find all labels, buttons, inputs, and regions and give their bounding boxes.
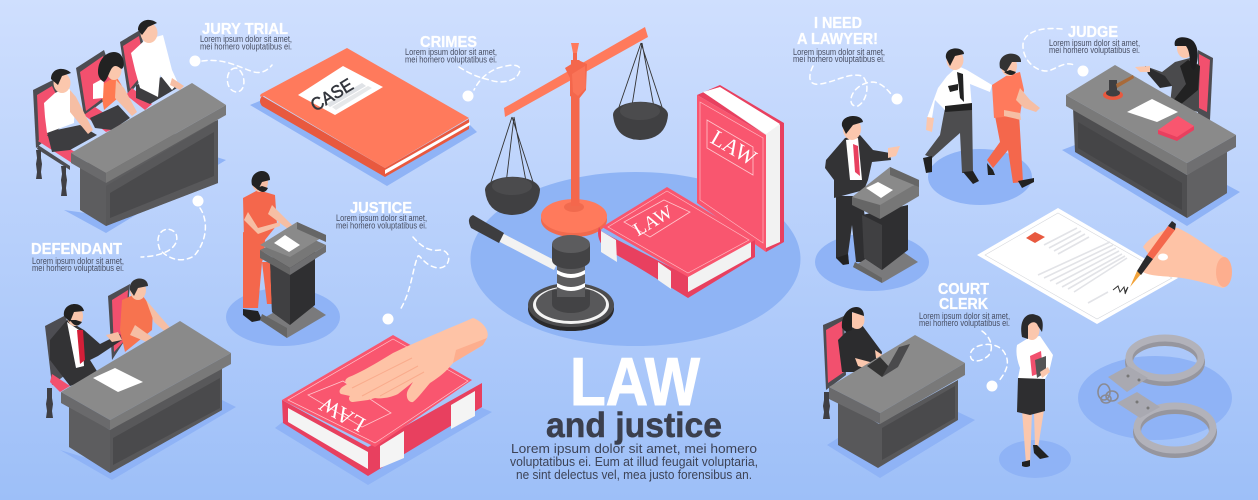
document text lines	[1038, 228, 1127, 303]
heading: judge	[1049, 24, 1140, 55]
book title: LAW	[315, 392, 369, 438]
paper	[977, 208, 1178, 324]
clerk legs	[1022, 410, 1049, 467]
main title	[546, 344, 722, 445]
book body	[282, 335, 482, 476]
heading: justice: mei homero voluptatibus ei.	[336, 220, 427, 230]
floor circle	[928, 149, 1032, 205]
main title: and justice	[546, 406, 722, 445]
heading: court clerk: mei homero voluptatibus ei.	[919, 318, 1010, 328]
signature	[1113, 286, 1128, 294]
case folder body	[260, 48, 470, 177]
panel: lawyer at podium	[815, 116, 929, 291]
clerk desk body	[829, 335, 965, 468]
flat book title: LAW	[630, 202, 677, 241]
shadow under jury desk	[64, 155, 226, 233]
shadow under case folder	[250, 100, 477, 186]
papers	[1127, 99, 1178, 122]
heading: jury trial: Lorem ipsum dolor sit amet,	[200, 34, 292, 44]
mini law book	[1158, 116, 1194, 141]
panel: hand on law book	[275, 318, 492, 485]
floor circle	[815, 233, 929, 291]
clerk folders	[1030, 351, 1050, 378]
heading: I need a lawyer: I NEED	[814, 15, 862, 32]
heading: jury trial	[200, 21, 292, 52]
person: juror one	[44, 69, 97, 152]
heading: defendant	[31, 241, 124, 273]
person: defendant standing	[243, 171, 295, 322]
podium	[852, 167, 919, 283]
heading: justice: Lorem ipsum dolor sit amet,	[336, 213, 427, 223]
podium shadow	[226, 288, 340, 346]
cuff chain	[1098, 384, 1118, 403]
main title: LAW	[570, 344, 701, 420]
book title	[308, 381, 391, 438]
heading: I need a lawyer: Lorem ipsum dolor sit amet,	[793, 47, 885, 57]
heading: defendant: Lorem ipsum dolor sit amet,	[32, 256, 124, 266]
gavel base	[528, 283, 614, 331]
heading: I need a lawyer: A LAWYER!	[797, 31, 878, 48]
scale beam	[504, 27, 648, 117]
writing hand	[1142, 228, 1232, 288]
table shadow	[60, 400, 236, 480]
defendant table body	[61, 321, 231, 473]
bench shadow	[1062, 145, 1240, 226]
clerk blouse	[1016, 336, 1053, 379]
connector: jury trial	[190, 56, 272, 92]
upper cuff	[1129, 338, 1201, 382]
panel: officer and prisoner	[923, 48, 1040, 205]
chairs	[33, 30, 152, 196]
heading: I need a lawyer	[793, 15, 885, 64]
podium	[260, 222, 326, 338]
judge chair	[1198, 50, 1213, 120]
right pan	[613, 43, 668, 140]
person: judge	[1135, 37, 1200, 112]
heading: I need a lawyer: mei homero voluptatibus ei.	[793, 54, 885, 64]
panel: flat law book	[598, 187, 755, 298]
hand	[340, 318, 488, 402]
heading: judge: Lorem ipsum dolor sit amet,	[1049, 38, 1140, 48]
mini gavel	[1103, 75, 1134, 100]
gavel handle	[469, 215, 558, 270]
main description: Lorem ipsum dolor sit amet, mei homero	[511, 441, 757, 456]
case label: CASE	[307, 74, 357, 115]
panel: judge bench	[1062, 37, 1240, 226]
panel: central ellipse platform	[470, 172, 800, 346]
cuff plates	[1108, 366, 1160, 418]
connector: defendant	[141, 196, 205, 260]
main description: voluptatibus ei. Eum at illud feugait voluptaria,	[510, 454, 758, 469]
floor circle	[999, 440, 1071, 478]
heading: crimes: Lorem ipsum dolor sit amet,	[405, 47, 497, 57]
person: juror two	[90, 52, 137, 130]
person: juror three	[131, 20, 184, 104]
heading: crimes: mei homero voluptatibus ei.	[405, 54, 497, 64]
person: defendant seated	[120, 279, 172, 352]
chairs	[45, 284, 130, 418]
book shadow	[275, 407, 492, 485]
clerk chair	[823, 316, 846, 390]
person: clerk	[838, 307, 884, 372]
person: lawyer	[825, 116, 900, 265]
panel: signing document	[977, 208, 1232, 324]
heading: judge: mei homero voluptatibus ei.	[1049, 45, 1140, 55]
case label	[298, 66, 383, 115]
heading: justice	[336, 200, 427, 230]
lower cuff	[1137, 406, 1213, 454]
heading: crimes: CRIMES	[420, 34, 477, 51]
connector: justice	[382, 237, 449, 324]
heading: defendant: mei homero voluptatibus ei.	[32, 263, 124, 273]
heading: crimes	[405, 34, 497, 64]
heading: defendant: DEFENDANT	[31, 241, 122, 258]
left pan	[485, 117, 540, 215]
gavel head	[552, 235, 590, 313]
panel: defendant table	[45, 279, 236, 480]
heading: jury trial: mei homero voluptatibus ei.	[200, 42, 292, 52]
heading: jury trial: JURY TRIAL	[202, 21, 288, 38]
heading: court clerk: Lorem ipsum dolor sit amet,	[919, 311, 1010, 321]
laptop	[867, 344, 910, 377]
scale base	[541, 199, 607, 237]
panel: court clerk desk	[823, 307, 975, 478]
person: officer	[923, 48, 992, 184]
pen	[1130, 221, 1176, 287]
stamp	[1026, 232, 1045, 243]
connector: crimes	[459, 65, 520, 102]
person: lawyer seated	[50, 304, 122, 386]
bench body	[1066, 65, 1236, 218]
panel: case folder	[250, 48, 477, 186]
connector: lawyer	[810, 66, 902, 106]
jury desk	[71, 83, 226, 226]
flat book title	[624, 200, 690, 241]
panel: gavel	[469, 215, 614, 331]
person: prisoner	[987, 54, 1040, 188]
clerk head	[1021, 314, 1043, 340]
heading: judge: JUDGE	[1068, 24, 1118, 41]
desk shadow	[827, 412, 975, 478]
scale hub	[565, 43, 587, 100]
connector: judge	[1023, 28, 1088, 77]
panel: jury trial	[33, 20, 226, 233]
heading: court clerk: COURT	[938, 281, 989, 298]
upright book title: LAW	[707, 125, 761, 171]
heading: court clerk	[919, 281, 1010, 328]
clerk skirt	[1017, 376, 1045, 415]
heading: justice: JUSTICE	[350, 200, 412, 217]
panel: defendant podium	[226, 171, 340, 346]
connector: court clerk	[970, 331, 1007, 392]
panel: scales of justice	[485, 27, 668, 237]
main description: ne sint delectus vel, mea justo forensibus an.	[516, 467, 752, 482]
scale post	[571, 60, 580, 206]
heading: court clerk: CLERK	[939, 296, 988, 313]
panel: upright law book	[697, 85, 784, 252]
handcuffs backdrop	[1078, 356, 1232, 440]
panel: handcuffs	[1078, 338, 1232, 454]
panel: court clerk figure	[999, 314, 1071, 478]
main description	[510, 441, 758, 482]
